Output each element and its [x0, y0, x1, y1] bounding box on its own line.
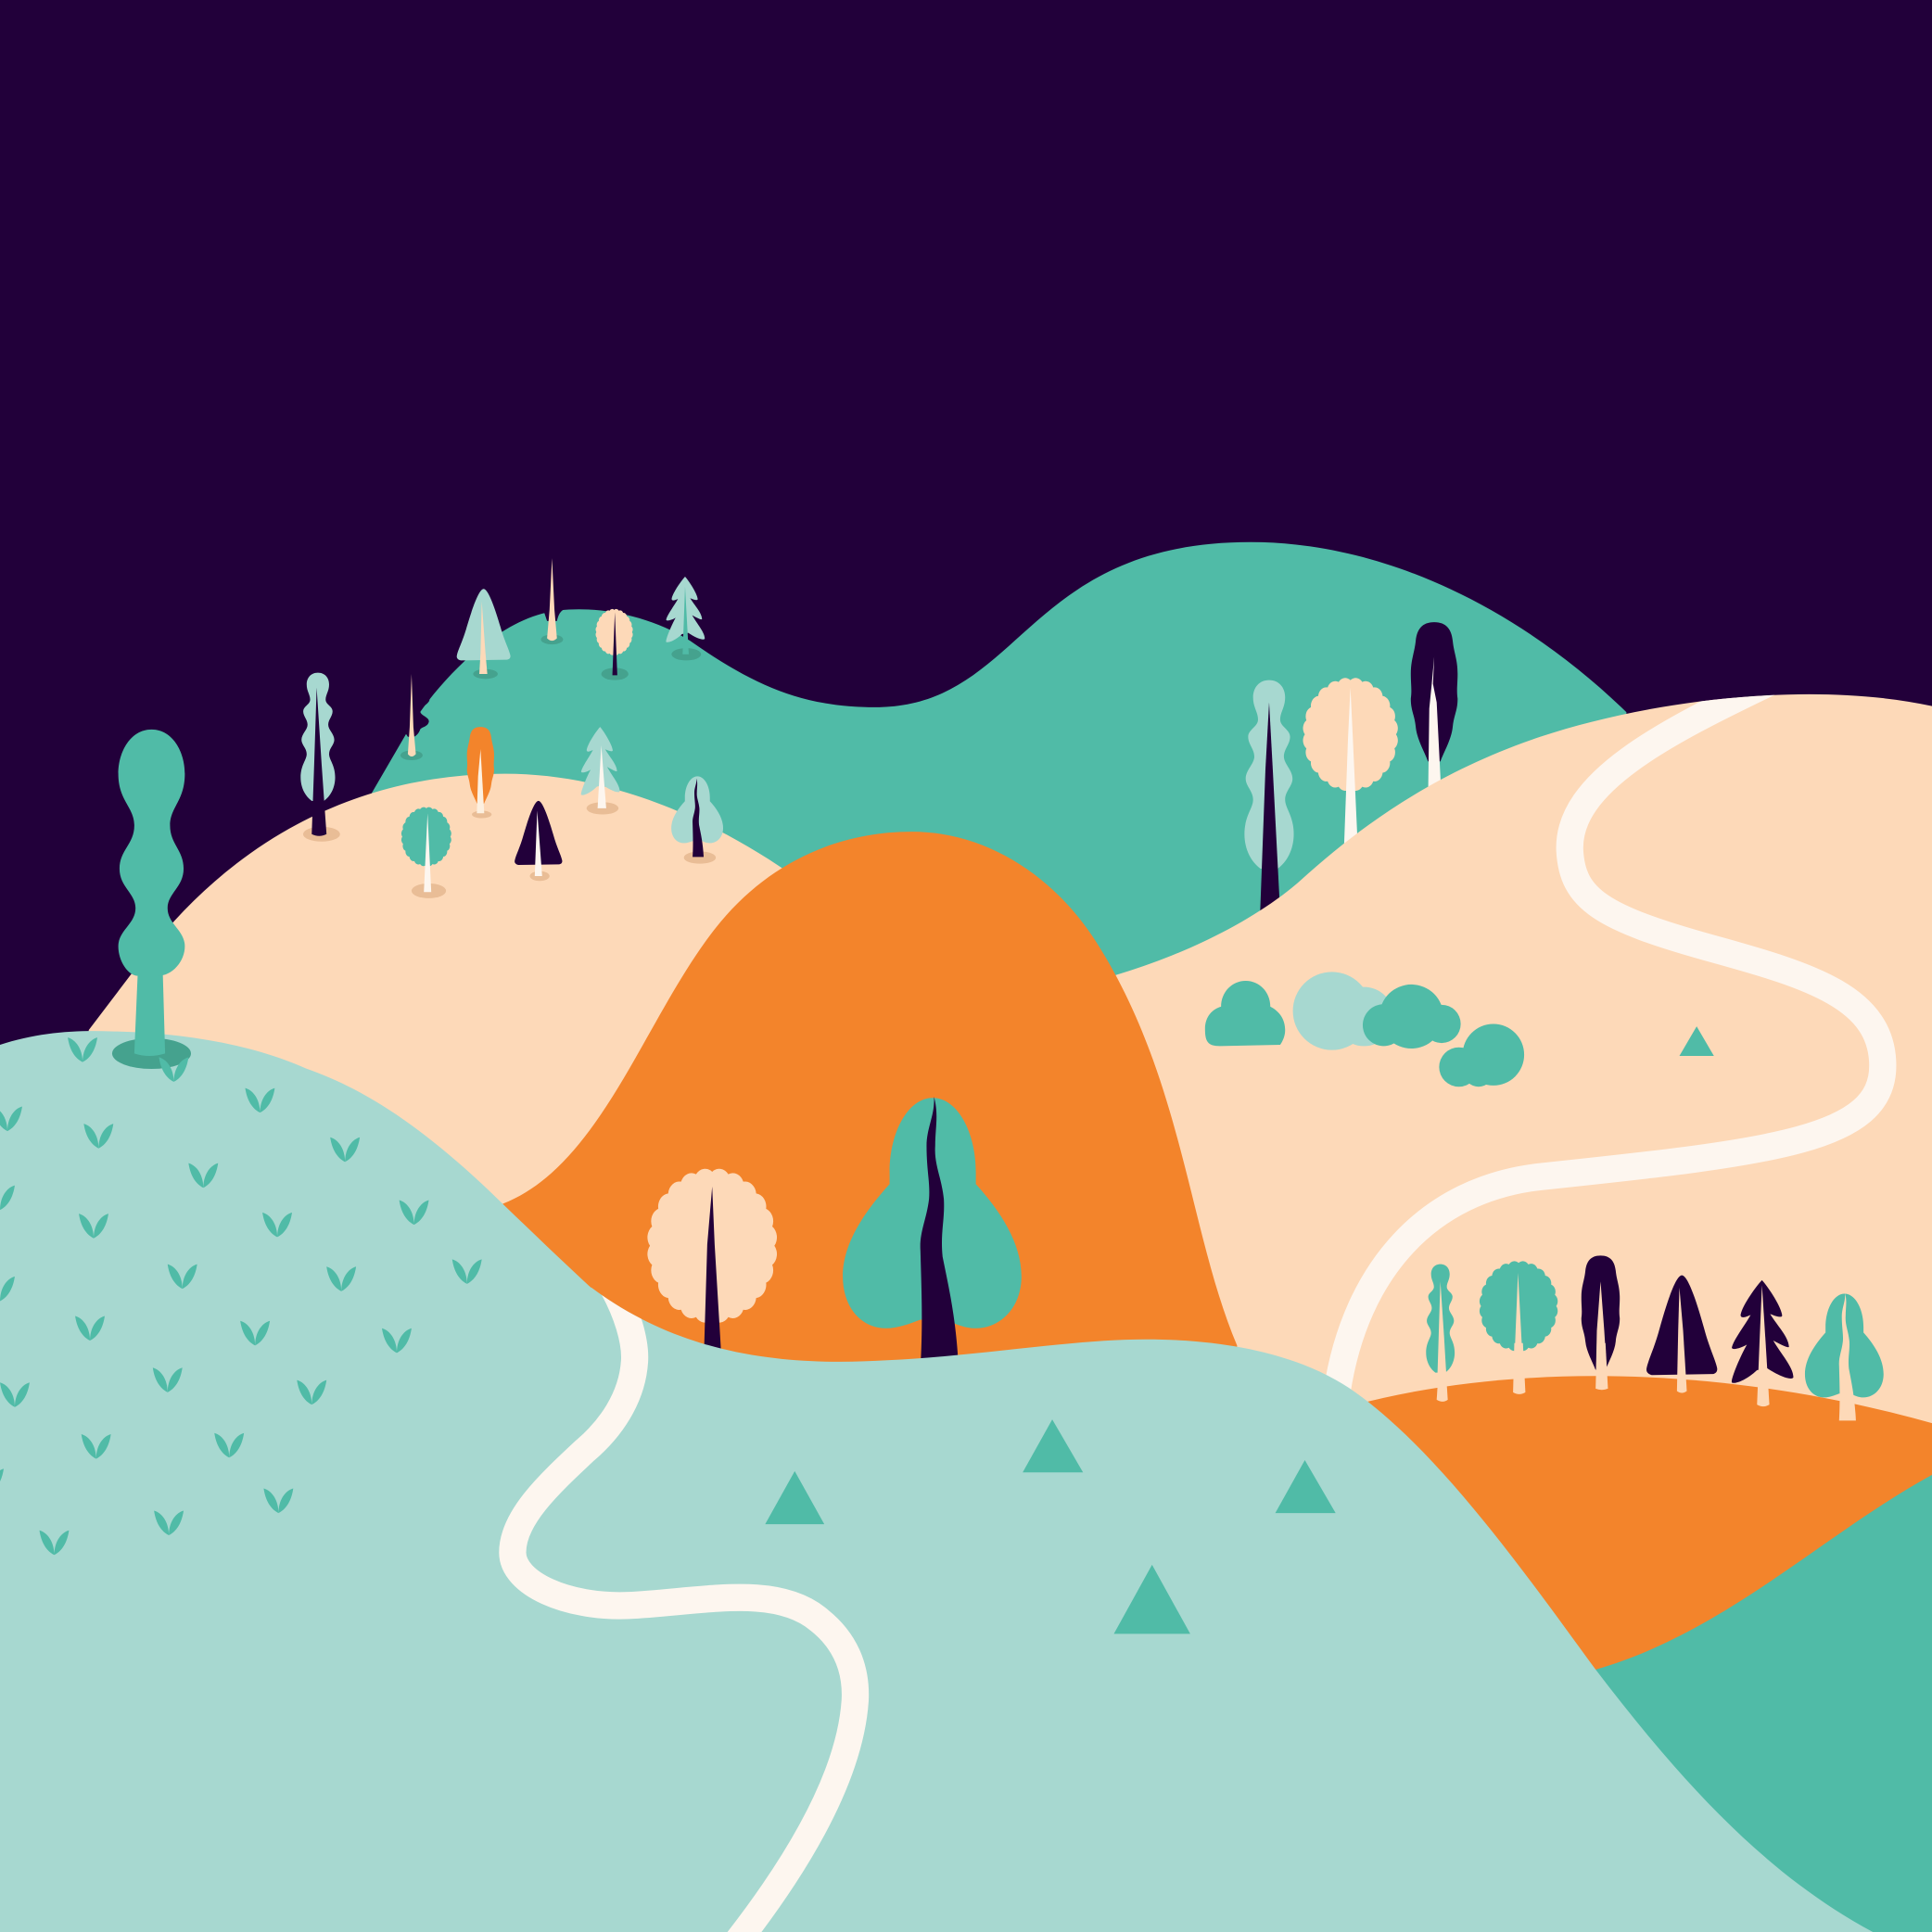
tree: pale pear	[671, 776, 723, 864]
trunk: dark pine tree	[1757, 1285, 1770, 1406]
trunk: teal pear tree	[1839, 1293, 1856, 1420]
tree: teal wavy	[1426, 1265, 1455, 1402]
teal bottom right corner	[1595, 1475, 1932, 1932]
tree: orange slim	[467, 727, 494, 819]
peach right hill	[1060, 694, 1932, 1540]
tree: dark cone	[515, 801, 562, 881]
trees on peach left hill	[300, 673, 723, 898]
trunk: teal round tree	[1513, 1343, 1525, 1394]
tree: pale wavy large	[1244, 680, 1294, 936]
tree: dark slim with cream trunk	[540, 558, 563, 644]
trees on right ridge, crowns	[1426, 1255, 1884, 1402]
trunk: dark slim tree	[1595, 1343, 1608, 1390]
far teal hill	[367, 542, 1626, 1010]
tree: peach round large	[647, 1169, 777, 1367]
tree crown	[119, 730, 184, 976]
tree: teal round	[1480, 1261, 1557, 1394]
triangle	[765, 1471, 824, 1524]
trees behind right peach hill	[1244, 622, 1457, 936]
tree: teal pear large	[843, 1097, 1022, 1367]
triangle	[1276, 1460, 1336, 1513]
trunk: teal wavy tree	[1437, 1343, 1448, 1402]
tree: peach round large	[1303, 678, 1398, 875]
tree: dark slim large	[1411, 622, 1457, 801]
tree: teal round	[401, 807, 451, 898]
tree: pale pine	[581, 727, 620, 815]
tree: dark pine	[1732, 1280, 1793, 1383]
winding road on peach hill	[1337, 680, 1883, 1392]
tree: pale pine	[666, 577, 705, 660]
pale teal left hill	[0, 1031, 616, 1932]
orange lower right hill	[1355, 1376, 1932, 1725]
tree: pale wavy with dark trunk	[300, 673, 340, 842]
tree: dark cone	[1646, 1276, 1717, 1375]
peach left hill	[89, 774, 789, 1232]
tree trunk	[134, 967, 165, 1056]
landscape illustration	[0, 541, 1932, 1932]
bush: teal left	[1205, 981, 1285, 1046]
large teal tree on left	[112, 730, 191, 1069]
small triangle on peach hill	[1680, 1026, 1714, 1056]
tree shadow	[112, 1038, 191, 1069]
trunk: dark cone tree	[1677, 1288, 1687, 1393]
triangle	[1113, 1565, 1190, 1633]
winding road on foreground hill	[513, 1277, 856, 1932]
trunks over orange right hill	[1437, 1285, 1856, 1420]
orange central hill	[502, 832, 1237, 1417]
tree: peach round	[596, 609, 633, 680]
bushes	[1205, 972, 1524, 1087]
trees on orange hill	[647, 1097, 1022, 1367]
sprouts on left hill	[0, 1037, 482, 1555]
bush: teal middle	[1363, 985, 1461, 1049]
tree: dark wavy with cream trunk	[394, 666, 429, 760]
trees on far teal hill	[394, 558, 705, 760]
triangle	[1023, 1419, 1083, 1472]
bush: pale	[1293, 972, 1393, 1050]
teal triangles on foreground hill	[765, 1419, 1336, 1633]
bush: teal right	[1439, 1023, 1524, 1087]
pale teal foreground hill	[0, 1232, 1873, 1932]
tree: teal pear	[1805, 1294, 1884, 1397]
tree: dark slim	[1582, 1255, 1620, 1390]
tree: pale cone	[457, 589, 511, 679]
